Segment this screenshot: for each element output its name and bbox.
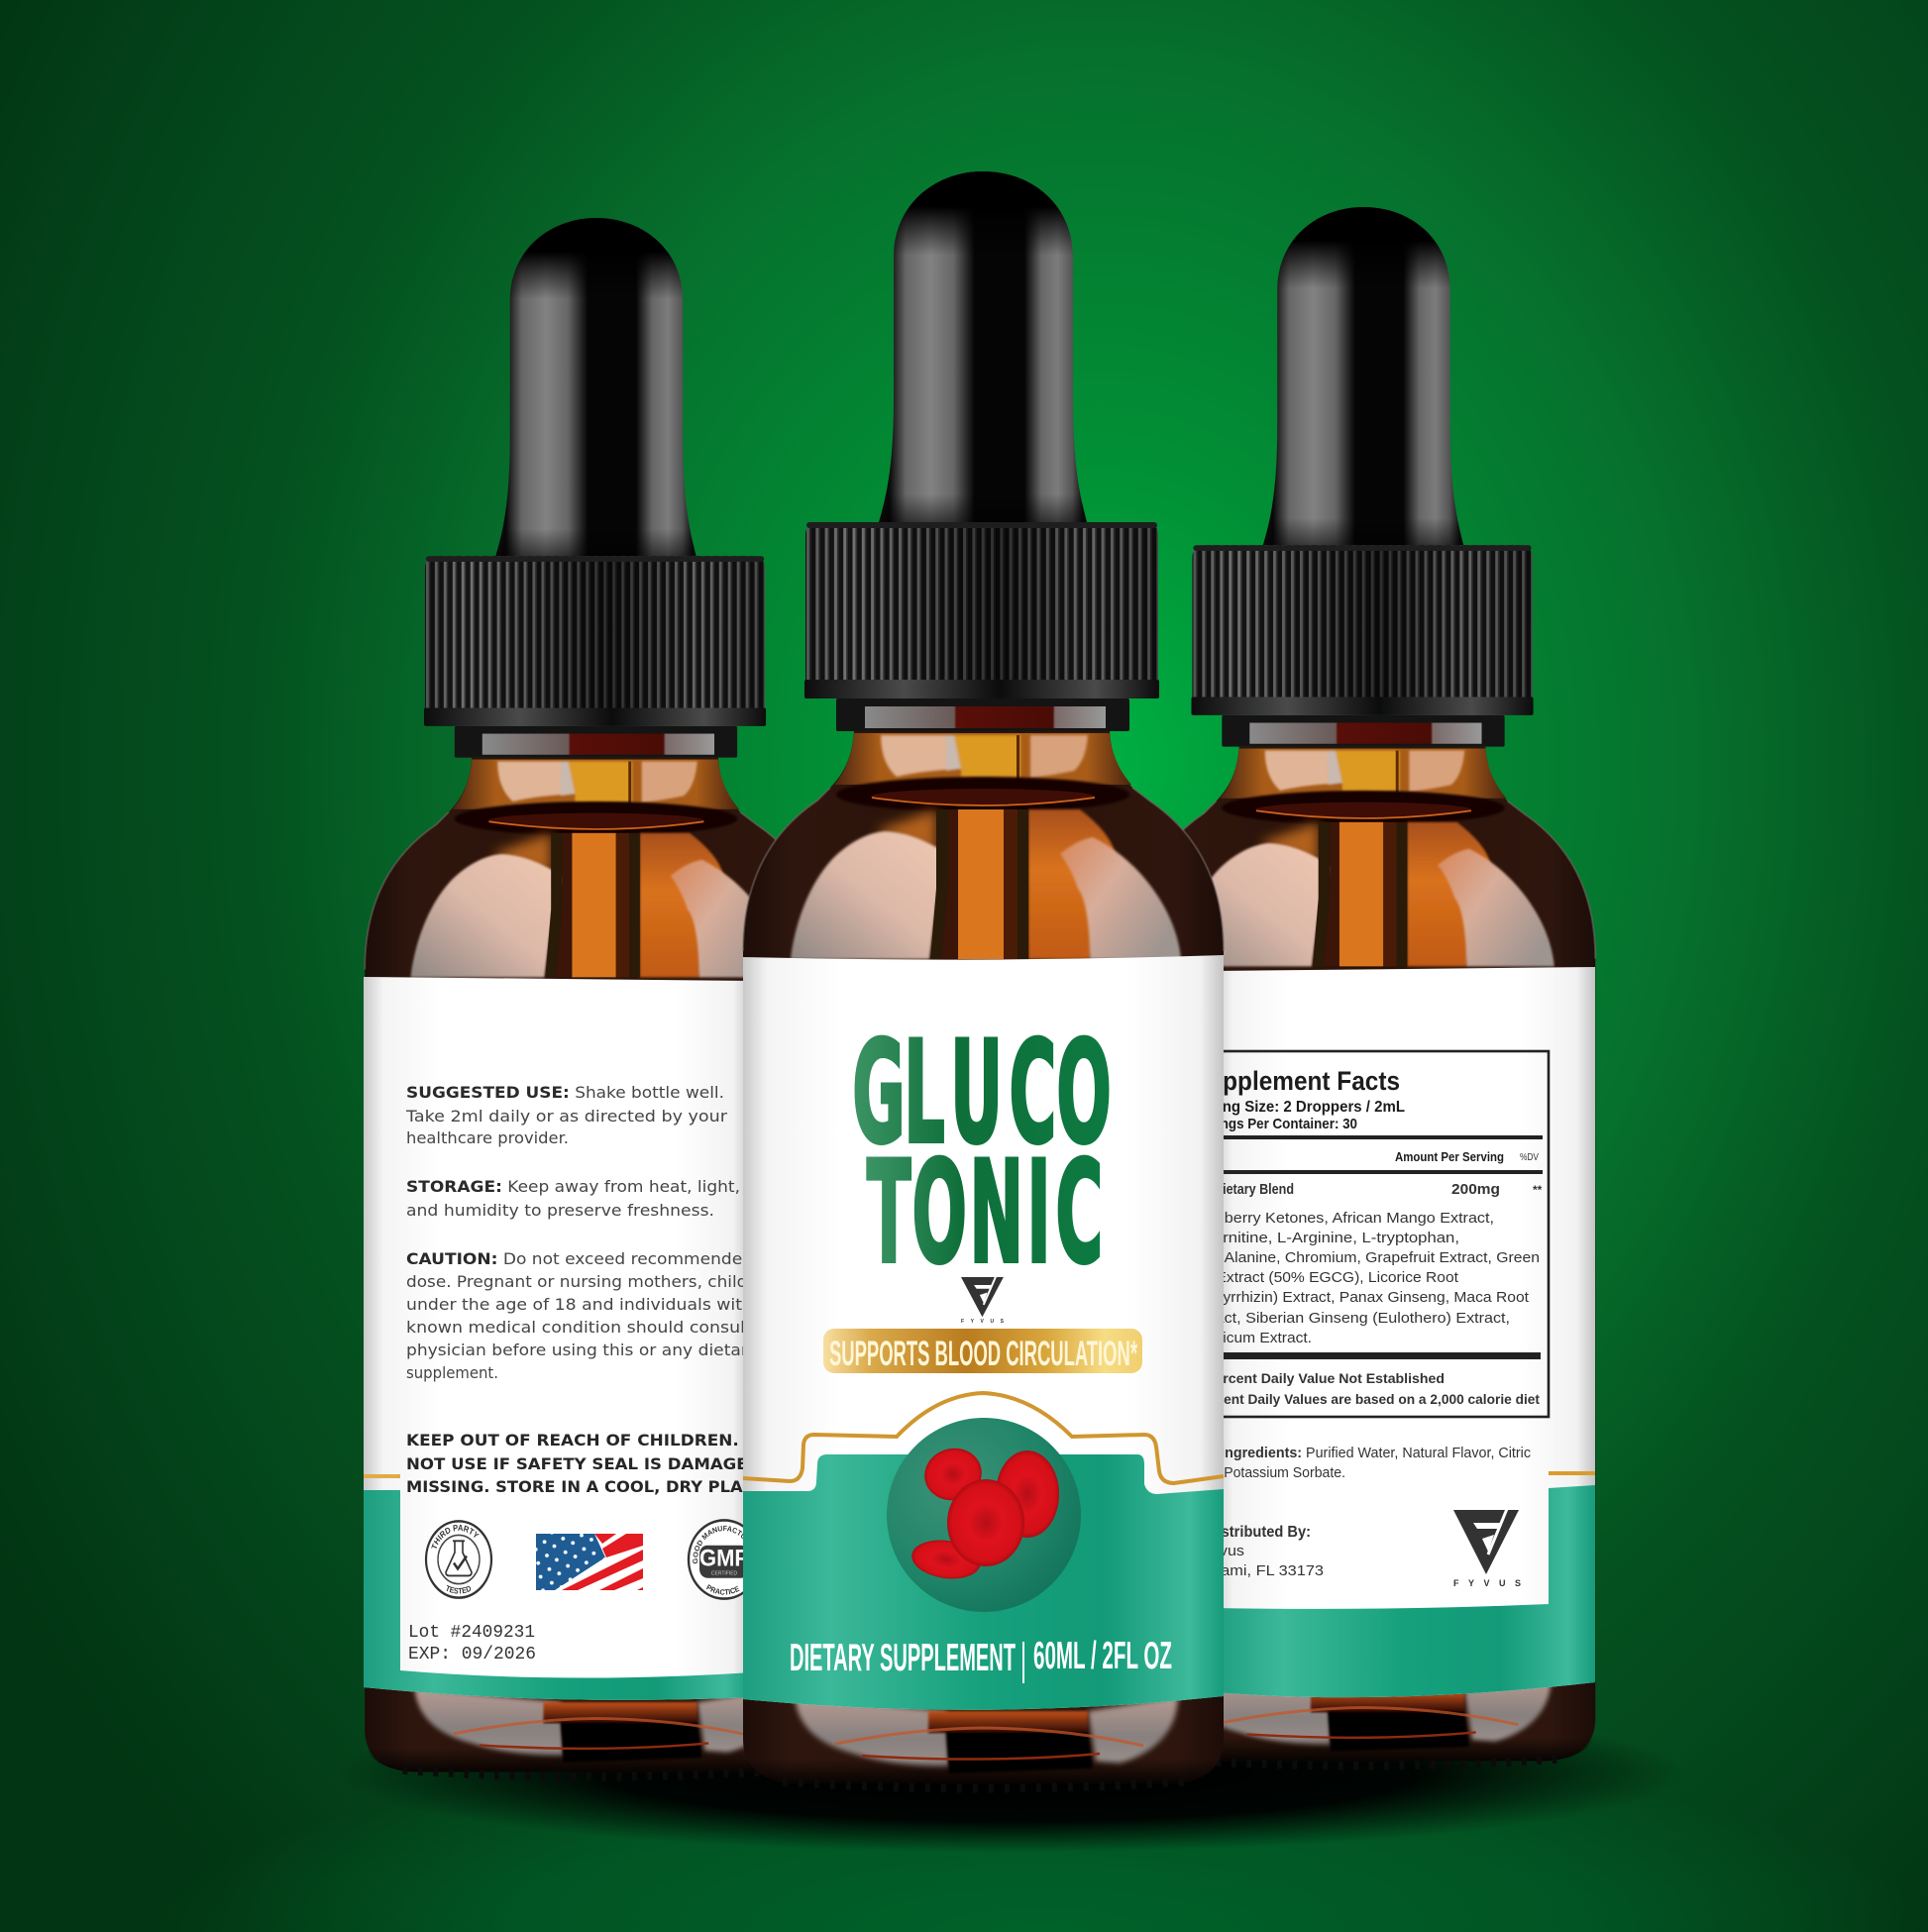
distributor: Miami, FL 33173	[1204, 1562, 1324, 1579]
warning text: KEEP OUT OF REACH OF CHILDREN. DO	[406, 1431, 773, 1449]
supplement facts panel: Servings Per Container: 30	[1188, 1116, 1357, 1132]
storage text	[406, 1177, 740, 1220]
icon: fyvus logo	[1453, 1509, 1521, 1588]
suggested use text: SUGGESTED USE: Shake bottle well.	[406, 1083, 724, 1102]
suggested use text	[405, 1083, 727, 1147]
suggested use text: healthcare provider.	[406, 1128, 569, 1147]
warning text: MISSING. STORE IN A COOL, DRY PLACE.	[406, 1477, 772, 1496]
right label paper	[1214, 967, 1595, 1697]
icon: third party tested badge	[424, 1520, 493, 1599]
other ingredients	[1179, 1445, 1531, 1481]
lot and expiry: EXP: 09/2026	[408, 1645, 536, 1664]
supplement facts panel: L-Carnitine, L-Arginine, L-tryptophan,	[1187, 1230, 1459, 1246]
other ingredients: Acid, Potassium Sorbate.	[1189, 1464, 1345, 1481]
left label teal band	[364, 1490, 753, 1700]
left bottle: directions label	[364, 218, 794, 1781]
caution text: supplement.	[406, 1363, 498, 1382]
blood cell illustration	[887, 1418, 1081, 1612]
warning text: NOT USE IF SAFETY SEAL IS DAMAGED OR	[406, 1454, 794, 1473]
supplement facts panel: Beta-Alanine, Chromium, Grapefruit Extract, Green	[1187, 1249, 1540, 1266]
icon: third party tested badge: TESTED	[446, 1585, 472, 1593]
right label gold line	[1549, 1471, 1595, 1475]
supplement facts panel: Capsicum Extract.	[1187, 1330, 1312, 1346]
right label teal band	[1214, 1485, 1595, 1697]
supplement facts panel: Tea Extract (50% EGCG), Licorice Root	[1187, 1269, 1459, 1286]
supplement facts panel: **Percent Daily Value Not Established	[1195, 1370, 1445, 1386]
caution text: CAUTION: Do not exceed recommended	[406, 1249, 753, 1268]
center label paper	[743, 955, 1224, 1710]
supplement facts panel: Raspberry Ketones, African Mango Extract,	[1187, 1210, 1494, 1227]
icon: GMP badge: CERTIFIED	[711, 1570, 737, 1576]
other ingredients: Other ingredients: Purified Water, Natural Flavor, Citric	[1179, 1445, 1531, 1461]
lot and expiry	[408, 1623, 536, 1664]
distributor: Fyvus	[1202, 1543, 1244, 1559]
right bottle: supplement facts label	[1132, 207, 1595, 1766]
left label gold line	[364, 1474, 400, 1478]
supplement facts panel: (Glycyrrhizin) Extract, Panax Ginseng, Maca Root	[1187, 1289, 1530, 1306]
storage text: and humidity to preserve freshness.	[406, 1201, 714, 1220]
dietary supplement line: 60ML / 2FL OZ	[1033, 1635, 1172, 1677]
floor glow	[149, 1744, 1928, 1932]
icon: GMP badge	[688, 1519, 749, 1600]
supplement facts panel: 200mg	[1451, 1181, 1500, 1198]
product name	[852, 1012, 1112, 1296]
icon: small fyvus logo: FYVUS	[961, 1319, 1005, 1325]
suggested use text: Take 2ml daily or as directed by your	[405, 1107, 727, 1126]
dietary supplement line: DIETARY SUPPLEMENT	[790, 1637, 1016, 1679]
caution text: known medical condition should consult a	[406, 1318, 768, 1337]
supplement facts panel: **	[1533, 1183, 1543, 1197]
distributor: Distributed By:	[1207, 1524, 1311, 1541]
supplement facts panel: Extract, Siberian Ginseng (Eulothero) Extract,	[1187, 1310, 1510, 1327]
supplement facts panel: %DV	[1520, 1152, 1539, 1163]
product name: GLUCO	[852, 1012, 1112, 1176]
supplement facts panel: Dietary Blend	[1214, 1182, 1294, 1198]
center bottle: front label	[743, 171, 1224, 1788]
supplement facts panel: Amount Per Serving	[1395, 1150, 1504, 1164]
warning text	[406, 1431, 794, 1496]
lot and expiry: Lot #2409231	[408, 1623, 535, 1643]
icon: small fyvus logo	[961, 1276, 1005, 1325]
caution text: physician before using this or any dietary	[406, 1341, 758, 1359]
supplement facts panel: *Percent Daily Values are based on a 2,000 calorie diet	[1189, 1391, 1540, 1407]
supplement facts panel	[1184, 1051, 1549, 1417]
icon: GMP badge: GOOD MANUFACTURING	[693, 1526, 743, 1563]
caution text: dose. Pregnant or nursing mothers, children	[406, 1272, 775, 1291]
center label teal band	[743, 1454, 1224, 1710]
supplement facts panel: Supplement Facts	[1192, 1066, 1400, 1096]
left label paper	[364, 977, 753, 1700]
icon: GMP badge: GMP	[699, 1545, 749, 1571]
storage text: STORAGE: Keep away from heat, light,	[406, 1177, 740, 1196]
caution text: under the age of 18 and individuals with a	[406, 1295, 769, 1314]
bottle shadow	[337, 1694, 1684, 1853]
caution text	[406, 1249, 775, 1382]
product name: TONIC	[867, 1131, 1103, 1296]
distributor	[1202, 1524, 1324, 1579]
claim pill: SUPPORTS BLOOD CIRCULATION*	[829, 1335, 1137, 1373]
icon: american flag	[536, 1534, 643, 1590]
icon: third party tested badge: THIRD PARTY	[431, 1524, 480, 1549]
icon: fyvus logo: FYVUS	[1453, 1578, 1521, 1588]
claim pill	[823, 1329, 1142, 1373]
icon: GMP badge: PRACTICE	[706, 1584, 740, 1595]
supplement facts panel: Serving Size: 2 Droppers / 2mL	[1186, 1099, 1405, 1116]
gold arch line	[743, 1393, 1224, 1483]
